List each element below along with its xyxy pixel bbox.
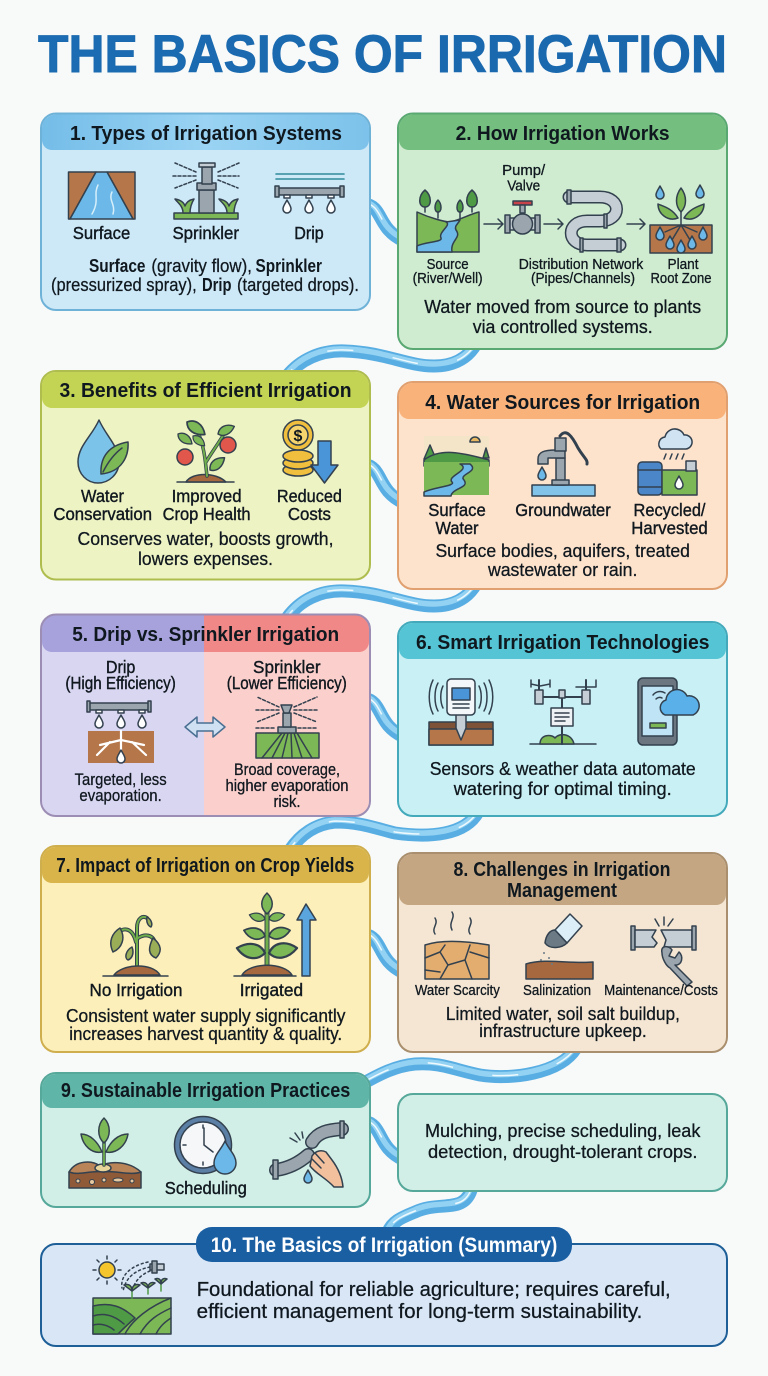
- panel 3 description: [78, 528, 334, 569]
- panel 6 card: [398, 622, 727, 816]
- panel 7 header bar: [42, 847, 369, 883]
- panel 3 heading: 3. Benefits of Efficient Irrigation: [60, 379, 352, 402]
- label: distribution network: [519, 257, 644, 287]
- panel 4 description: wastewater or rain.: [487, 559, 637, 580]
- label: surface water: Water: [436, 518, 479, 538]
- panel 6 description: [430, 758, 696, 799]
- panel 1 description: Sprinkler: [256, 256, 322, 276]
- label: drip high efficiency: [65, 657, 176, 693]
- panel 2 description: [424, 296, 701, 337]
- panel 5 header left: [42, 615, 204, 652]
- label: salinization: Salinization: [523, 983, 591, 999]
- icon: leak repair pipe and hand: [273, 1121, 344, 1187]
- panel 6 description: watering for optimal timing.: [453, 778, 672, 799]
- panel 7 description: [66, 1005, 346, 1044]
- panel 4 description: Surface bodies, aquifers, treated: [435, 540, 690, 561]
- icon: sprinkler: [173, 163, 239, 219]
- panel 8 heading: Management: [507, 879, 617, 902]
- icon: healthy irrigated plant with arrow: [234, 893, 316, 976]
- panel 10 description: Foundational for reliable agriculture; requires careful,: [197, 1278, 671, 1301]
- panel 8 description: Limited water, soil salt buildup,: [446, 1003, 680, 1024]
- icon: sun, hose and field: [93, 1256, 171, 1334]
- panel 9 header bar: [42, 1074, 369, 1108]
- panel 2 heading: 2. How Irrigation Works: [456, 122, 670, 145]
- icon: drip emitter with roots: [87, 701, 154, 763]
- icon: phone with cloud: [638, 678, 699, 745]
- panel 3 header bar: [42, 372, 369, 408]
- label: plant root zone: Root Zone: [650, 271, 712, 287]
- panel 1 description: Drip: [202, 275, 232, 295]
- label: water scarcity: Water Scarcity: [415, 983, 500, 999]
- label: sprinkler: Sprinkler: [172, 223, 239, 243]
- panel 6 header bar: [399, 623, 726, 659]
- label: drip high efficiency: (High Efficiency): [65, 673, 176, 693]
- icon: drip line: [275, 174, 344, 213]
- panel 3 card: [41, 371, 370, 580]
- panel 10 heading pill: [196, 1227, 572, 1262]
- icon: weather station: [530, 680, 596, 744]
- label: improved crop health: Crop Health: [163, 504, 251, 524]
- panel 9 card: [41, 1073, 370, 1207]
- icon: water drop and leaf: [78, 420, 128, 483]
- water stream connectors: [286, 202, 576, 1232]
- panel 9b text: Mulching, precise scheduling, leak: [425, 1120, 701, 1141]
- icon: broken pipe and wrench: [631, 917, 696, 986]
- panel 8 heading: [454, 858, 670, 902]
- label: sprinkler lower efficiency: Sprinkler: [253, 657, 321, 677]
- text: sprinkler note: [226, 761, 348, 811]
- panel 7 description: Consistent water supply significantly: [66, 1005, 346, 1026]
- label: drip high efficiency: Drip: [106, 657, 135, 677]
- panel 5 left half: [42, 615, 204, 816]
- panel 3: benefits of efficient irrigation: [41, 371, 370, 580]
- text: sprinkler note: higher evaporation: [226, 777, 348, 795]
- panel 1 card: [41, 114, 370, 310]
- panel 2 header bar: [399, 114, 726, 150]
- arrow: comparison double arrow: [185, 717, 225, 737]
- label: surface: Surface: [73, 223, 130, 243]
- panel 1 description: (targeted drops).: [237, 275, 359, 295]
- panel 1 heading: 1. Types of Irrigation Systems: [70, 122, 342, 145]
- panel 6 heading: 6. Smart Irrigation Technologies: [416, 631, 709, 654]
- icon: cracked dry ground: [425, 912, 489, 979]
- label: distribution network: Distribution Network: [519, 257, 644, 273]
- label: no irrigation: No Irrigation: [90, 980, 182, 1000]
- label: source: (River/Well): [413, 271, 483, 287]
- panel 10: summary: [41, 1227, 727, 1346]
- label: sprinkler lower efficiency: (Lower Efficiency): [227, 673, 347, 693]
- panel 1 description: [51, 256, 359, 295]
- icon: crop health plant: [176, 417, 236, 482]
- panel 1: types of irrigation systems: [41, 114, 370, 310]
- label: water conservation: Water: [81, 486, 124, 506]
- label: surface water: Surface: [428, 500, 486, 520]
- panel 7 description: increases harvest quantity & quality.: [69, 1023, 342, 1044]
- panel 1 description: (gravity flow),: [151, 256, 252, 276]
- panel 10 description: efficient management for long-term sustainability.: [197, 1300, 642, 1323]
- panel 8 description: infrastructure upkeep.: [479, 1020, 647, 1041]
- panel 5: drip vs sprinkler: [41, 614, 370, 816]
- arrow: source to valve: [484, 219, 503, 229]
- panel 2 card: [398, 114, 727, 349]
- label: pump valve: Pump/: [502, 163, 546, 179]
- panel 8 card: [398, 853, 727, 1052]
- panel 4 card: [398, 382, 727, 589]
- label: source: Source: [427, 257, 469, 273]
- label: reduced costs: [277, 486, 342, 524]
- text: drip note: Targeted, less: [75, 771, 167, 789]
- panel 3 description: Conserves water, boosts growth,: [78, 528, 334, 549]
- panel 7: crop yields: [41, 846, 370, 1052]
- label: surface water: [428, 500, 486, 538]
- panel 4 heading: 4. Water Sources for Irrigation: [425, 391, 700, 414]
- label: irrigated: Irrigated: [240, 980, 303, 1000]
- label: reduced costs: Reduced: [277, 486, 342, 506]
- icon: mulched seedling: [69, 1118, 141, 1188]
- panel 10 description: [197, 1278, 671, 1323]
- label: pump valve: Valve: [507, 179, 540, 195]
- text: drip note: evaporation.: [79, 787, 162, 805]
- panel 8 heading: 8. Challenges in Irrigation: [454, 858, 670, 881]
- panel 4: water sources: [398, 382, 727, 589]
- panel 1 description: Surface: [89, 256, 146, 276]
- icon: salt shaker: [526, 914, 593, 979]
- icon: surface water landscape: [424, 436, 489, 496]
- label: distribution network: (Pipes/Channels): [531, 271, 635, 287]
- panel 7 heading: 7. Impact of Irrigation on Crop Yields: [56, 854, 354, 877]
- label: drip: Drip: [294, 223, 324, 243]
- panel 9: sustainable practices: [41, 1073, 370, 1207]
- arrow: valve to pipes: [544, 219, 563, 229]
- icon: coins and down arrow: $: [294, 428, 303, 445]
- title: THE BASICS OF IRRIGATION: [38, 25, 727, 84]
- label: recycled harvested: Recycled/: [634, 500, 706, 520]
- panel 5 heading: 5. Drip vs. Sprinkler Irrigation: [72, 623, 339, 646]
- label: plant root zone: [650, 257, 712, 287]
- panel 5 header right: [204, 615, 369, 652]
- panel 4 description: [435, 540, 690, 580]
- label: recycled harvested: [631, 500, 708, 538]
- text: drip note: [75, 771, 167, 805]
- icon: clock with water drop: [174, 1116, 236, 1174]
- label: reduced costs: Costs: [288, 504, 331, 524]
- panel 2: how irrigation works: [398, 114, 727, 349]
- panel 1 header bar: [42, 114, 369, 150]
- label: sprinkler lower efficiency: [227, 657, 347, 693]
- text: sprinkler note: Broad coverage,: [234, 761, 340, 779]
- label: maintenance costs: Maintenance/Costs: [604, 983, 718, 999]
- icon: plant root zone: [650, 185, 712, 253]
- icon: wilted plant: [103, 917, 168, 976]
- panel 2 description: via controlled systems.: [473, 316, 653, 337]
- label: recycled harvested: Harvested: [631, 518, 708, 538]
- panel 6: smart technologies: [398, 622, 727, 816]
- label: source: [413, 257, 483, 287]
- panel 4 header bar: [399, 383, 726, 419]
- panel 9b: practices description: [398, 1094, 727, 1191]
- icon: sprinkler on field: [256, 697, 319, 758]
- icon: coins and down arrow: [283, 420, 338, 483]
- panel 9b card: [398, 1094, 727, 1191]
- label: groundwater: Groundwater: [515, 500, 611, 520]
- panel 3 description: lowers expenses.: [138, 548, 273, 569]
- panel 8 header bar: [399, 854, 726, 905]
- panel 9b text: detection, drought-tolerant crops.: [428, 1141, 697, 1162]
- icon: river source: [417, 190, 479, 252]
- label: pump valve: [502, 163, 546, 195]
- icon: soil sensor: [429, 679, 493, 745]
- panel 5 right half: [204, 615, 369, 816]
- panel 10 card: [41, 1244, 727, 1346]
- panel 10 heading: 10. The Basics of Irrigation (Summary): [211, 1234, 557, 1257]
- panel 6 description: Sensors & weather data automate: [430, 758, 696, 779]
- icon: distribution pipes: [567, 190, 621, 252]
- label: water conservation: Conservation: [53, 504, 152, 524]
- panel 5 border: [41, 614, 370, 816]
- label: water conservation: [53, 486, 152, 524]
- icon: valve: [505, 201, 540, 234]
- label: improved crop health: [163, 486, 251, 524]
- panel 2 description: Water moved from source to plants: [424, 296, 701, 317]
- arrow: pipes to plant: [627, 219, 645, 229]
- panel 8 description: [446, 1003, 680, 1041]
- text: sprinkler note: risk.: [274, 793, 300, 811]
- label: scheduling: Scheduling: [165, 1178, 247, 1198]
- icon: hand pump: [532, 433, 595, 496]
- panel 9b text: [425, 1120, 701, 1162]
- icon: recycled and harvested water: [638, 429, 697, 495]
- panel 9 heading: 9. Sustainable Irrigation Practices: [61, 1079, 350, 1102]
- label: improved crop health: Improved: [172, 486, 242, 506]
- label: plant root zone: Plant: [668, 257, 698, 273]
- panel 1 description: (pressurized spray),: [51, 275, 197, 295]
- panel 7 card: [41, 846, 370, 1052]
- icon: surface canal: [68, 172, 135, 219]
- panel 8: challenges: [398, 853, 727, 1052]
